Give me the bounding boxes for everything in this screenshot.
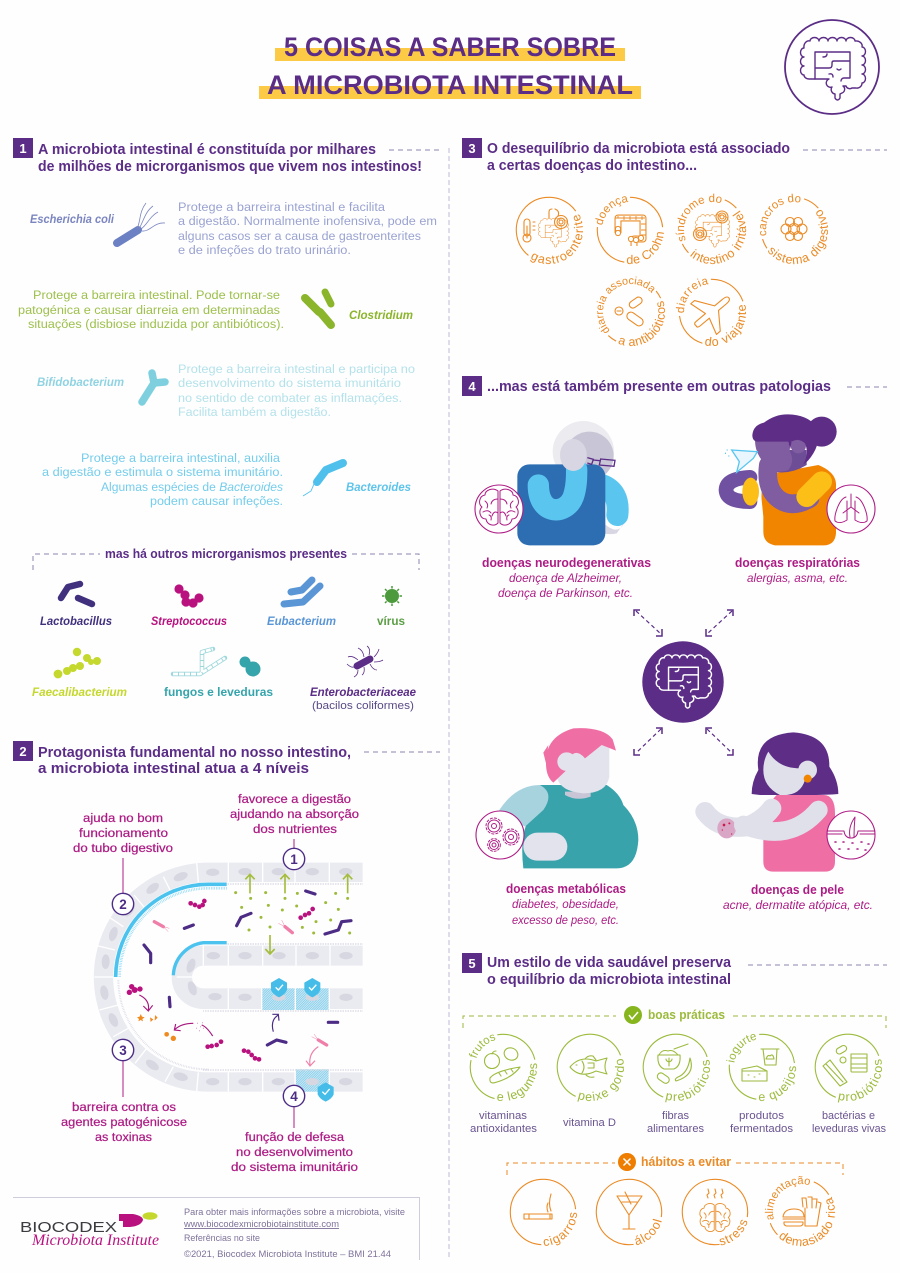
good practices heading: boas práticas — [648, 1008, 725, 1022]
heading 5: o equilíbrio da microbiota intestinal — [487, 972, 731, 988]
magenta chains — [127, 899, 315, 1062]
icon: iogurte e queijos — [726, 1034, 796, 1102]
arrows — [634, 610, 733, 755]
title: A MICROBIOTA INTESTINAL — [267, 70, 633, 100]
label: defence — [231, 1130, 358, 1174]
label: digestive tube — [73, 811, 173, 855]
icon: lungs — [827, 485, 875, 533]
icon: gears — [476, 811, 524, 859]
absorption arrows — [245, 874, 352, 954]
label: produtos — [730, 1110, 793, 1135]
icon: diarreia associada a antibioticos: a antibióticos — [618, 301, 666, 346]
icon: alimentacao demasiado rica — [764, 1176, 835, 1246]
footer text — [183, 1207, 405, 1259]
icon: sindrome do intestino irritavel: síndrome do — [676, 194, 722, 242]
label: digestion: favorece a digestão — [238, 792, 351, 806]
toxins and debris — [137, 1014, 204, 1041]
heading 1: A microbiota intestinal é constituída por milhares — [38, 142, 376, 158]
Bifidobacterium: no sentido de combater as inflamações. — [178, 391, 402, 405]
label: vitamina D: vitamina D — [563, 1117, 616, 1129]
Faecalibacterium: Faecalibacterium — [32, 685, 127, 699]
icon: prebioticos: prebióticos — [665, 1060, 710, 1102]
icon: brain — [475, 485, 523, 533]
Escherichia coli: a digestão. Normalmente inofensiva, pode em — [178, 214, 437, 228]
title: 5 COISAS A SABER SOBRE — [284, 32, 616, 62]
icon: stress — [682, 1178, 748, 1246]
icon: doenca de Crohn — [595, 196, 664, 264]
label: metabolic: diabetes, obesidade, — [512, 897, 619, 911]
Bacteroides: a digestão e estimula o sistema imunitário. — [42, 465, 283, 479]
label: metabolic — [506, 882, 626, 927]
panel: section 1 microorganisms — [13, 138, 440, 712]
Clostridium — [18, 288, 413, 331]
Eubacterium: Eubacterium — [267, 614, 336, 628]
icon: cancros do sistema digestivo: sistema digestivo — [768, 210, 828, 264]
Bacteroides: Bacteroides — [346, 480, 411, 494]
label: skin — [723, 883, 873, 912]
Streptococcus: Streptococcus — [151, 614, 227, 628]
nutrient dots — [234, 891, 351, 934]
Lactobacillus — [40, 584, 112, 628]
icon: alimentacao demasiado rica: alimentação — [764, 1176, 810, 1220]
virus: vírus — [377, 614, 405, 628]
Bifidobacterium: Bifidobacterium — [37, 375, 124, 389]
heading 5 — [462, 953, 887, 988]
label: neurodegenerative: doença de Parkinson, etc. — [498, 586, 633, 600]
Clostridium: situações (disbiose induzida por antibióticos). — [28, 317, 284, 331]
icon: sindrome do intestino irritavel: intestino irritável — [690, 210, 746, 264]
figure: person with metabolic disease — [498, 728, 638, 868]
icon: diarreia do viajante — [676, 278, 746, 346]
Escherichia coli: Protege a barreira intestinal e facilita — [178, 200, 385, 214]
label: neurodegenerative: doença de Alzheimer, — [509, 571, 622, 585]
icon: stress: stress — [720, 1220, 748, 1246]
footer text: ©2021, Biocodex Microbiota Institute – BMI 21.44 — [184, 1249, 391, 1259]
label: digestion — [230, 792, 359, 836]
heading 3: a certas doenças do intestino... — [487, 158, 697, 174]
label: metabolic: excesso de peso, etc. — [512, 913, 619, 927]
number 3 — [112, 1039, 134, 1061]
panel: section 5 healthy lifestyle — [462, 953, 887, 1246]
footer text: Para obter mais informações sobre a microbiota, visite — [184, 1207, 405, 1217]
good practices heading — [463, 1006, 886, 1028]
Lactobacillus: Lactobacillus — [40, 614, 112, 628]
icon: iogurte e queijos: iogurte — [726, 1034, 756, 1062]
label: vitaminas — [470, 1110, 537, 1135]
label: neurodegenerative — [482, 556, 651, 600]
label: barrier: agentes patogénicose — [61, 1115, 187, 1129]
number 2 — [112, 893, 134, 915]
icon: cancros do sistema digestivo: cancros do — [760, 194, 800, 236]
heading 1: 1 — [19, 141, 27, 156]
Bifidobacterium: Facilita também a digestão. — [178, 405, 331, 419]
Clostridium: patogénica e causar diarreia em determinadas — [18, 303, 280, 317]
label: vitaminas: antioxidantes — [470, 1123, 537, 1135]
cell separators — [94, 863, 330, 1092]
label: bacterias: leveduras vivas — [812, 1123, 886, 1135]
icon: central intestine — [642, 641, 724, 723]
panel: section 4 other pathologies — [462, 376, 887, 927]
Enterobacteriaceae — [310, 646, 416, 712]
heading 2: a microbiota intestinal atua a 4 níveis — [38, 761, 309, 777]
Eubacterium — [267, 580, 336, 628]
connector lines — [123, 839, 294, 1128]
label: vitaminas: vitaminas — [479, 1110, 527, 1122]
heading 1: de milhões de microrganismos que vivem nos intestinos! — [38, 159, 422, 175]
panel: section 3 intestinal diseases — [462, 138, 887, 346]
icon: gastroenterite: gastroenterite — [530, 214, 584, 264]
icon: peixe gordo — [556, 1034, 624, 1102]
cell nuclei — [99, 868, 353, 1085]
fungi and yeasts — [164, 649, 273, 699]
heading 4: 4 — [468, 379, 476, 394]
Bifidobacterium: Protege a barreira intestinal e participa no — [178, 362, 415, 376]
number 1: 1 — [290, 852, 298, 867]
logo — [20, 1212, 159, 1249]
pink bacteria — [154, 920, 327, 1045]
heading 4: ...mas está também presente em outras patologias — [487, 379, 831, 395]
heading 4 — [462, 376, 887, 396]
label: respiratory — [735, 556, 860, 585]
icon: diarreia do viajante: diarreia — [676, 278, 709, 313]
Enterobacteriaceae: (bacilos coliformes) — [312, 700, 414, 712]
label: neurodegenerative: doenças neurodegenerativas — [482, 556, 651, 570]
Escherichia coli: e de infeções do trato urinário. — [178, 243, 351, 257]
heading 3 — [462, 138, 887, 174]
Clostridium: Protege a barreira intestinal. Pode tornar-se — [33, 288, 280, 302]
Faecalibacterium — [32, 648, 127, 699]
heading 5: 5 — [468, 956, 476, 971]
label: defence: no desenvolvimento — [236, 1145, 353, 1159]
hatched immune cells — [262, 988, 329, 1092]
label: fibras — [647, 1110, 704, 1135]
title — [259, 32, 641, 100]
icon: sindrome do intestino irritavel — [676, 194, 746, 264]
habits to avoid heading: hábitos a evitar — [641, 1155, 731, 1169]
virus — [377, 586, 405, 628]
Bacteroides: podem causar infeções. — [150, 494, 283, 508]
icon: doenca de Crohn: de Crohn — [626, 232, 664, 264]
label: digestive tube: funcionamento — [79, 826, 168, 840]
label: digestion: ajudando na absorção — [230, 807, 359, 821]
Streptococcus — [151, 584, 227, 628]
icon: iogurte e queijos: e queijos — [758, 1066, 796, 1102]
label: skin: doenças de pele — [751, 883, 844, 897]
icon: prebioticos — [642, 1034, 710, 1102]
label: digestive tube: ajuda no bom — [83, 811, 163, 825]
icon: frutos e legumes — [469, 1034, 538, 1101]
icon: gastroenterite — [516, 196, 584, 264]
label: respiratory: alergias, asma, etc. — [747, 571, 848, 585]
label: fibras: alimentares — [647, 1123, 704, 1135]
logo: BIOCODEX — [20, 1220, 117, 1236]
icon: frutos e legumes: e legumes — [497, 1063, 538, 1101]
icon: probioticos: probióticos — [838, 1059, 882, 1102]
label: defence: do sistema imunitário — [231, 1160, 358, 1174]
heading 3: 3 — [468, 141, 476, 156]
number 3: 3 — [119, 1043, 127, 1058]
footer — [13, 1198, 420, 1260]
outer wall — [94, 863, 363, 1092]
icon: doenca de Crohn: doença — [595, 196, 628, 225]
label: metabolic: doenças metabólicas — [506, 882, 626, 896]
other microorganisms bracket — [33, 547, 419, 570]
icon: intestine badge — [785, 20, 879, 114]
panel: section 2 four levels — [13, 741, 440, 1174]
heading 2 — [13, 741, 440, 777]
mucus bands — [116, 884, 363, 1070]
icon: skin — [827, 811, 875, 859]
Bacteroides — [42, 451, 411, 508]
figure: person with allergy — [725, 414, 837, 545]
number 4 — [283, 1085, 305, 1107]
icon: diarreia associada a antibioticos: diarreia associada — [596, 276, 654, 333]
footer text: www.biocodexmicrobiotainstitute.com — [183, 1219, 339, 1229]
habits to avoid heading — [507, 1153, 843, 1175]
label: digestion: dos nutrientes — [253, 822, 337, 836]
label: digestive tube: do tubo digestivo — [73, 841, 173, 855]
figure: person with skin disease — [705, 732, 838, 872]
label: skin: acne, dermatite atópica, etc. — [723, 898, 873, 912]
Bifidobacterium — [37, 362, 415, 419]
label: bacterias: bactérias e — [822, 1110, 875, 1122]
inner wall — [172, 946, 363, 1009]
label: barrier — [61, 1100, 187, 1144]
icon: frutos e legumes: frutos — [469, 1034, 496, 1058]
Escherichia coli: Escherichia coli — [30, 212, 115, 226]
logo: Microbiota Institute — [31, 1232, 159, 1249]
purple rods — [144, 891, 351, 1045]
column divider — [448, 148, 450, 1260]
icon: cigarros — [510, 1178, 577, 1246]
figure: elderly person — [517, 421, 625, 545]
heading 2: Protagonista fundamental no nosso intestino, — [38, 745, 351, 761]
heading 1 — [13, 138, 440, 175]
heading 5: Um estilo de vida saudável preserva — [487, 955, 732, 971]
number 1 — [283, 848, 305, 870]
label: barrier: as toxinas — [95, 1130, 152, 1144]
icon: peixe gordo: peixe gordo — [577, 1059, 624, 1102]
Escherichia coli — [30, 200, 437, 257]
icon: diarreia do viajante: do viajante — [705, 304, 746, 346]
process arrows — [139, 995, 213, 1036]
label: defence: função de defesa — [245, 1130, 344, 1144]
Clostridium: Clostridium — [349, 308, 413, 322]
number 4: 4 — [290, 1089, 298, 1104]
label: produtos: fermentados — [730, 1123, 793, 1135]
Bacteroides: Protege a barreira intestinal, auxilia — [81, 451, 280, 465]
icon: alimentacao demasiado rica: demasiado rica — [779, 1196, 835, 1246]
icon: alcool — [596, 1178, 662, 1246]
label: respiratory: doenças respiratórias — [735, 556, 860, 570]
heading 2: 2 — [19, 744, 27, 759]
icon: cigarros: cigarros — [544, 1212, 577, 1246]
label: barrier: barreira contra os — [72, 1100, 176, 1114]
footer text: Referências no site — [184, 1233, 260, 1243]
heading 3: O desequilíbrio da microbiota está associado — [487, 141, 790, 157]
label: bacterias — [812, 1110, 886, 1135]
number 2: 2 — [119, 897, 127, 912]
fungi and yeasts: fungos e leveduras — [164, 685, 273, 699]
other microorganisms bracket: mas há outros microrganismos presentes — [105, 547, 347, 561]
Enterobacteriaceae: Enterobacteriaceae — [310, 685, 416, 699]
label: produtos: produtos — [739, 1110, 784, 1122]
intestine cross-section diagram — [94, 863, 363, 1102]
label: fibras: fibras — [662, 1110, 689, 1122]
Escherichia coli: alguns casos ser a causa de gastroenterites — [178, 229, 421, 243]
Bacteroides: Algumas espécies de Bacteroides — [101, 480, 283, 494]
shields — [271, 978, 287, 997]
icon: probioticos — [814, 1034, 882, 1102]
Bifidobacterium: desenvolvimento do sistema imunitário — [178, 376, 401, 390]
icon: alcool: álcool — [635, 1218, 662, 1245]
